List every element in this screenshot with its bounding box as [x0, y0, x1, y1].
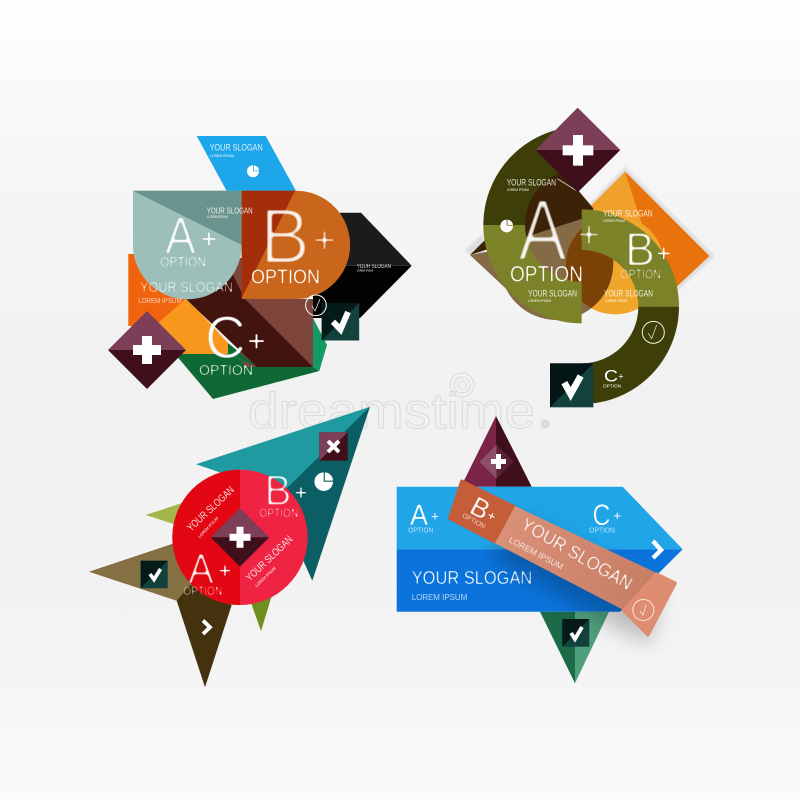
check square [322, 303, 359, 340]
check square [141, 561, 168, 588]
text: band B option: + [485, 507, 499, 524]
text: slogans on the orange and olive shapes: YOUR SLOGAN [603, 208, 653, 218]
tan arrow [89, 543, 195, 601]
tan diamond with disc [470, 167, 613, 320]
panel: top-right option group [465, 108, 715, 407]
text: C option [199, 304, 266, 379]
orange block [128, 254, 228, 354]
text: band slogan: YOUR SLOGAN [518, 514, 636, 594]
text: C option [603, 367, 624, 388]
text: A option: + [218, 558, 232, 583]
text: A option: + [201, 224, 217, 254]
text: C option: OPTION [589, 528, 615, 534]
panel: top-left option group [108, 136, 412, 399]
text: A option: OPTION [160, 254, 206, 270]
red circle [172, 470, 308, 605]
text: A option: A [188, 545, 215, 594]
chevron [203, 620, 210, 634]
green triangle [540, 612, 609, 683]
yellow disc with lens [566, 216, 664, 314]
text: arrow slogan [357, 264, 391, 272]
text: slogans on the orange and olive shapes [528, 208, 653, 303]
text: slogans on the orange and olive shapes: LOREM IPSUM [603, 219, 625, 223]
text: band slogan: LOREM IPSUM [507, 535, 565, 572]
text: banner slogan: YOUR SLOGAN [412, 567, 532, 588]
text: C option: OPTION [603, 383, 621, 388]
ring B [582, 209, 679, 404]
text: A option: A [518, 182, 567, 279]
text: rotated slogan, lower: LOREM IPSUM [254, 566, 277, 588]
text: band B option: B [465, 491, 495, 526]
text: top slogan: LOREM IPSUM [210, 154, 234, 158]
text: C option: + [613, 508, 621, 523]
text: top slogan [507, 178, 556, 192]
watermark: dreamstime [248, 383, 535, 439]
teal arrow [196, 407, 370, 581]
text: B option [251, 192, 336, 288]
text: A option: LOREM IPSUM [207, 215, 228, 219]
text: A option [160, 206, 253, 270]
text: rotated slogan, upper: YOUR SLOGAN [185, 484, 237, 534]
text: large slogan: YOUR SLOGAN [140, 279, 233, 296]
text: B option: + [656, 240, 671, 268]
small green triangles [146, 502, 272, 631]
panel: bottom-right option group [397, 416, 683, 683]
text: A option: + [577, 213, 601, 257]
text: B option [259, 467, 308, 520]
black arrow [313, 213, 412, 318]
text: rotated slogan, lower: YOUR SLOGAN [244, 534, 295, 584]
text: arrow slogan: LOREM IPSUM [357, 268, 374, 272]
text: slogans on the orange and olive shapes: YOUR SLOGAN [528, 288, 577, 298]
text: rotated slogan, upper [185, 484, 237, 539]
text: C option [589, 499, 621, 534]
A tab [133, 191, 242, 299]
text: B option: OPTION [620, 266, 661, 282]
text: slogans on the orange and olive shapes: LOREM IPSUM [605, 299, 627, 303]
outline check circle [306, 295, 326, 316]
text: band B option: OPTION [461, 513, 486, 531]
blue arrow banner [397, 487, 683, 612]
text: large slogan: LOREM IPSUM [138, 296, 182, 305]
text: band B option [461, 491, 499, 531]
green base [175, 318, 327, 399]
text: top slogan: YOUR SLOGAN [210, 142, 263, 152]
text: A option [510, 182, 601, 287]
text: C option: C [604, 367, 618, 386]
text: top slogan: LOREM IPSUM [507, 188, 529, 192]
pie icon [314, 472, 333, 491]
text: A option [408, 499, 439, 534]
pie icon [500, 220, 513, 232]
text: C option: + [618, 372, 624, 382]
text: C option: + [248, 325, 266, 358]
text: B option: B [625, 223, 655, 276]
ring A [483, 127, 592, 323]
outline check circle [642, 321, 664, 343]
text: B option: OPTION [251, 266, 320, 288]
text: banner slogan: LOREM IPSUM [412, 592, 467, 602]
orange diamond [590, 172, 709, 287]
text: A option: OPTION [510, 262, 583, 287]
text: top slogan [210, 142, 263, 158]
pie icon [247, 165, 259, 177]
text: A option: A [165, 206, 197, 265]
text: C option: C [592, 499, 610, 532]
text: A option: OPTION [183, 584, 222, 598]
maroon triangle [461, 416, 532, 487]
text: B option: + [312, 218, 336, 262]
band shadow [490, 515, 660, 645]
text: B option: OPTION [259, 506, 298, 520]
text: A option: A [410, 499, 428, 532]
text: A option [183, 545, 232, 598]
text: slogans on the orange and olive shapes: YOUR SLOGAN [604, 288, 653, 298]
text: slogans on the orange and olive shapes: LOREM IPSUM [528, 299, 551, 303]
text: B option: B [260, 192, 310, 280]
B tab [242, 191, 350, 299]
check square [562, 619, 589, 647]
text: top slogan: YOUR SLOGAN [507, 178, 556, 188]
text: rotated slogan, lower [244, 534, 295, 588]
blue slogan parallelogram [197, 136, 296, 191]
outline check circle [633, 600, 654, 620]
text: B option [620, 223, 671, 282]
dark brown arrow [177, 585, 232, 687]
text: B option: B [264, 467, 292, 515]
shapes: diamonds, rings and discs [465, 108, 715, 407]
check square [550, 363, 593, 407]
cross square [319, 432, 348, 461]
text: C option: C [205, 304, 246, 371]
plus diamond [211, 508, 269, 567]
text: A option: + [431, 508, 439, 524]
panel: bottom-left option group [89, 407, 370, 687]
text: A option: OPTION [408, 528, 433, 534]
text: A option: YOUR SLOGAN [207, 206, 253, 216]
plus diamond [536, 108, 620, 192]
text: banner slogan [412, 567, 532, 602]
diamond shadows [465, 167, 715, 292]
text: rotated slogan, upper: LOREM IPSUM [197, 516, 219, 539]
chevron [653, 541, 661, 558]
text: large slogan [138, 279, 233, 305]
text: C option: OPTION [199, 362, 253, 379]
text: B option: + [294, 480, 308, 505]
brown C panel [186, 258, 313, 367]
text: arrow slogan: YOUR SLOGAN [357, 264, 391, 270]
plus diamond [108, 311, 186, 389]
salmon band [450, 481, 676, 635]
